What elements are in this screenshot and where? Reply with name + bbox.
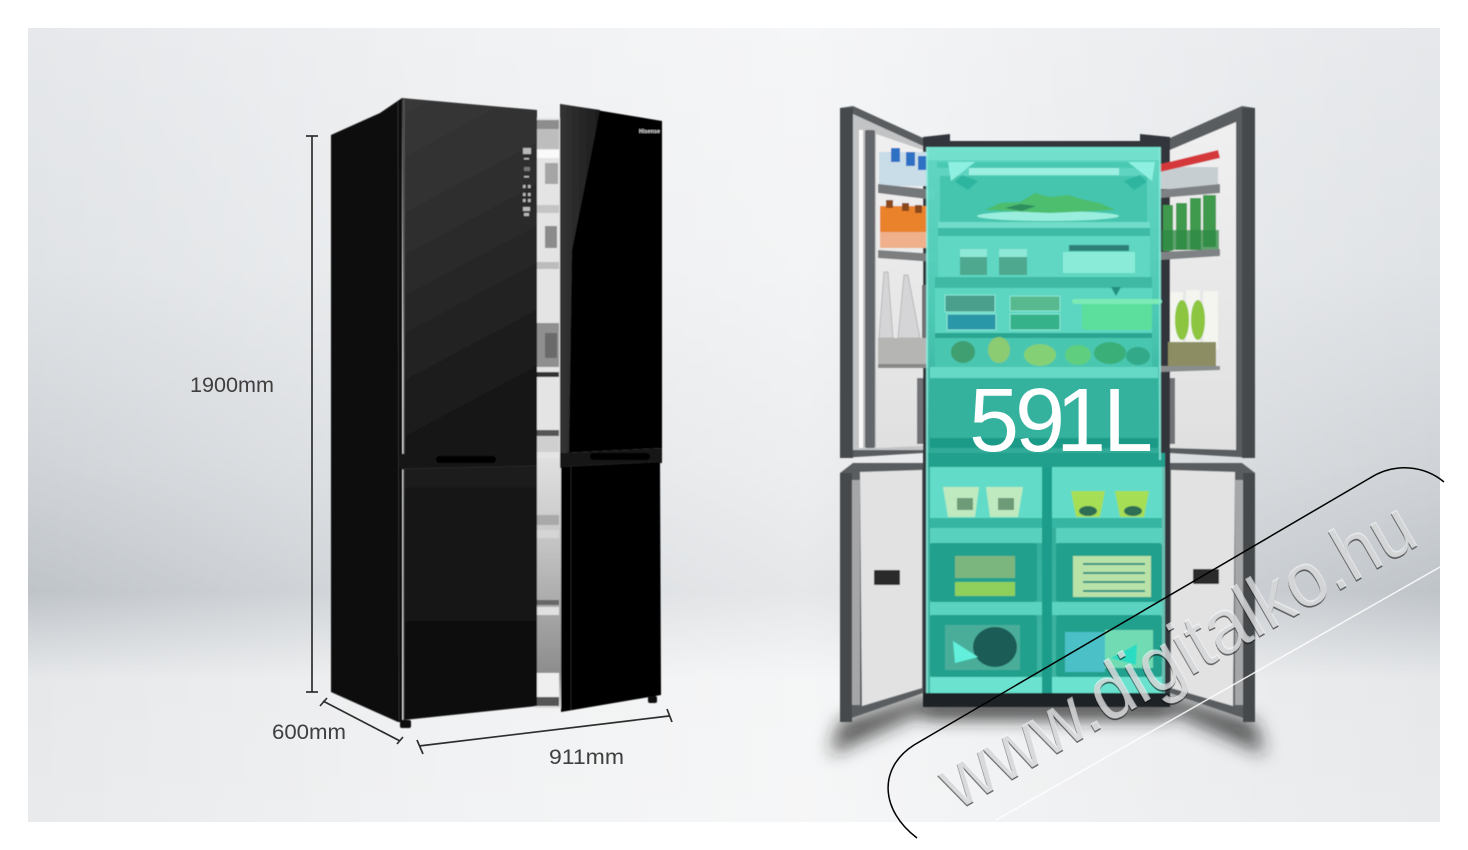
lower right door [1170,463,1255,722]
interior gap lower [535,458,562,708]
height dimension line [306,136,318,692]
upper left door [840,106,923,458]
depth label: 600mm [272,721,346,744]
interior gap upper [535,118,562,458]
left door contents [878,148,935,444]
jars [960,249,1027,275]
left upper door [402,98,537,458]
fridge feet [400,696,657,728]
teal capacity volume [927,147,1165,693]
fruit drawer [951,337,1150,366]
volume edge lines [927,147,1160,693]
capacity value: 591L [969,371,1153,471]
control panel [523,148,531,216]
watermark: digitalko.hu [888,468,1444,838]
upper right door [1170,106,1255,458]
height label: 1900mm [190,374,274,397]
product: closed black refrigerator [331,98,662,728]
watermark text: www.digitalko.hu [922,481,1430,825]
depth dimension line [320,698,403,744]
right upper door [560,104,662,453]
upper shelves [927,147,1160,448]
width dimension line [417,709,672,754]
food containers [945,295,1060,330]
cabinet [923,134,1170,707]
green pot [1072,287,1162,330]
air vents [948,162,1155,190]
handle band [400,448,662,470]
cake [1063,245,1135,273]
watermark outline [888,468,1444,838]
frozen food [943,487,1153,672]
freezer compartments [927,453,1165,693]
width label: 911mm [549,746,624,769]
lower left door [840,463,923,722]
watermark lower edge [996,567,1440,820]
right lower door [561,462,661,712]
fridge side panel [331,98,402,722]
salad plate [977,193,1119,221]
left lower door [404,466,537,720]
brand logo: Hisense [639,129,660,135]
right door contents [1157,150,1220,444]
floor shadow [830,695,1265,755]
product: open refrigerator with capacity overlay [830,106,1265,755]
